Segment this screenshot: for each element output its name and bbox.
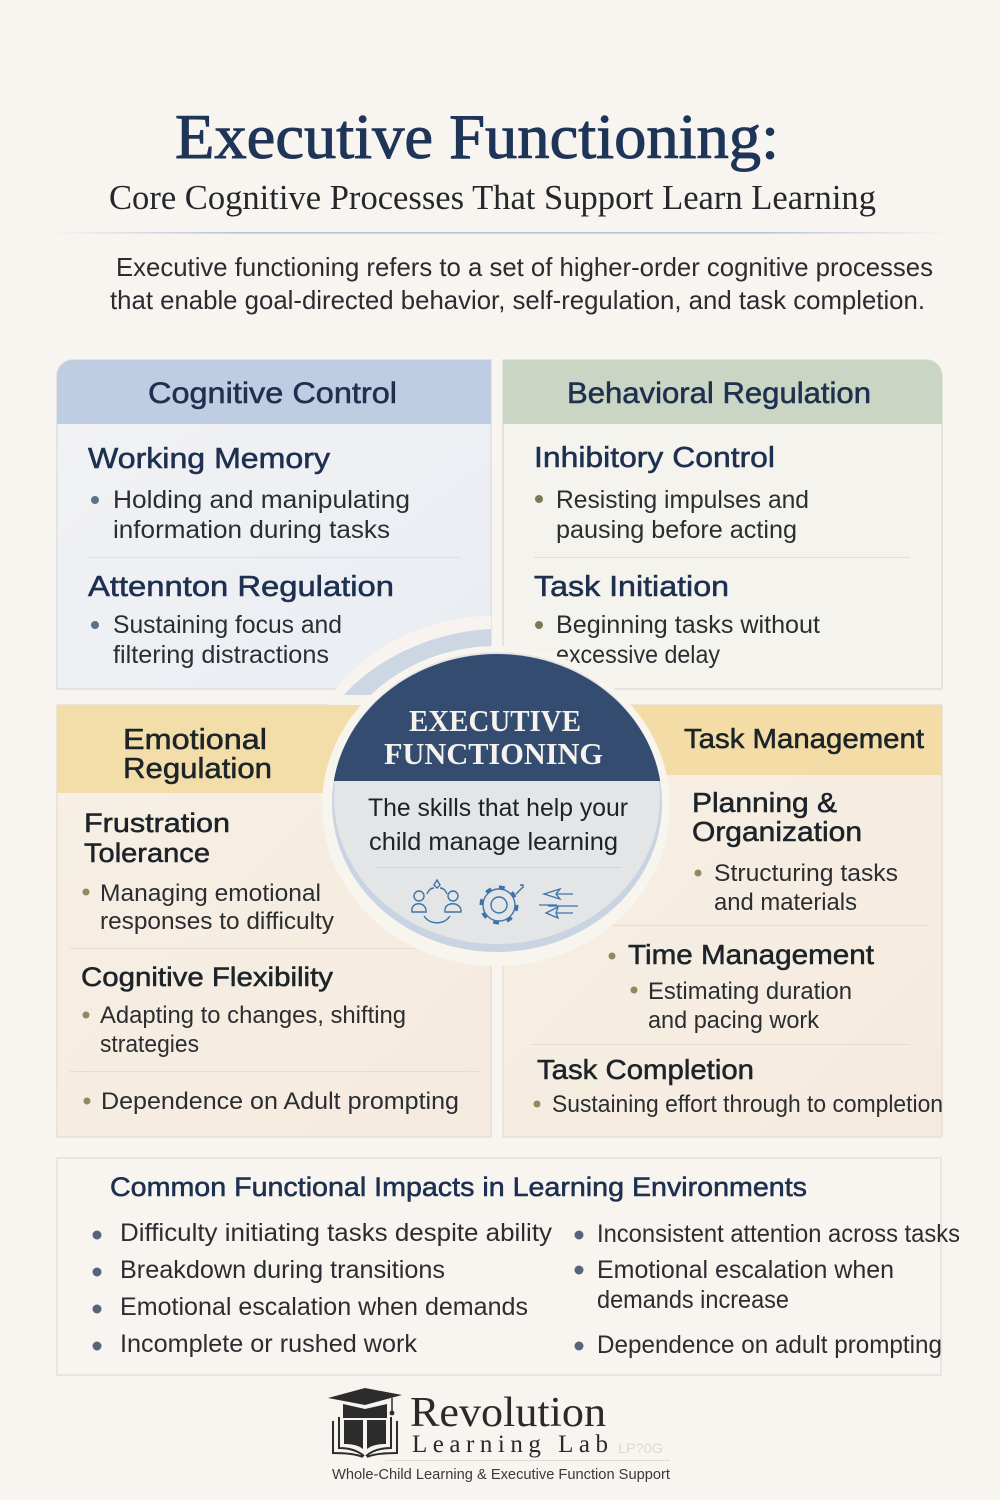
inhibitory control [534, 442, 809, 544]
dependence on adult prompting: Dependence on Adult prompting [101, 1088, 459, 1115]
frustration tolerance: Frustration [84, 808, 230, 838]
frustration tolerance: Managing emotional [100, 880, 321, 907]
working memory [88, 443, 410, 544]
planning and organization: Organization [692, 816, 862, 847]
task management header [503, 705, 942, 775]
emotional regulation header [57, 705, 491, 793]
badge text: child manage learning [369, 828, 618, 856]
attention regulation: Sustaining focus and [113, 611, 342, 639]
decorative ring behind badge [328, 616, 491, 705]
inhibitory control: pausing before acting [556, 516, 797, 544]
centre badge [322, 646, 670, 966]
tagline: Whole-Child Learning & Executive Function Support [332, 1467, 670, 1483]
left impact list: Difficulty initiating tasks despite ability [120, 1219, 553, 1247]
left impact list: Emotional escalation when demands [120, 1293, 528, 1321]
icon: graduation cap and book [328, 1388, 402, 1457]
cognitive flexibility: strategies [100, 1031, 199, 1058]
frustration tolerance: Tolerance [84, 838, 210, 868]
attention regulation [88, 571, 394, 669]
impacts heading: Common Functional Impacts in Learning Environments [110, 1172, 807, 1202]
task completion: Task Completion [537, 1054, 754, 1085]
badge title: FUNCTIONING [384, 736, 603, 771]
badge text [368, 794, 628, 856]
frustration tolerance [82, 808, 334, 935]
left impact list [92, 1219, 553, 1358]
frustration tolerance: responses to difficulty [100, 908, 334, 935]
logo: LP?0G [618, 1440, 663, 1456]
attention regulation: Attennton Regulation [88, 571, 394, 603]
time management: Estimating duration [648, 978, 852, 1005]
working memory: information during tasks [113, 516, 390, 544]
right impact list: Emotional escalation when [597, 1256, 894, 1284]
cognitive flexibility: Adapting to changes, shifting [100, 1002, 406, 1029]
logo: Learning Lab [412, 1431, 608, 1458]
task initiation: Beginning tasks without [556, 611, 820, 639]
task initiation: Task Initiation [534, 571, 729, 603]
intro text: Executive functioning refers to a set of higher-order cognitive processes [116, 252, 933, 282]
cognitive control header: Cognitive Control [148, 377, 397, 410]
task initiation [534, 571, 820, 669]
working memory: Holding and manipulating [113, 486, 410, 514]
planning and organization: Structuring tasks [714, 860, 898, 887]
panel: cognitive control [57, 360, 491, 689]
title: Executive Functioning: [175, 102, 779, 172]
time management: and pacing work [648, 1007, 820, 1034]
cognitive control header [57, 360, 491, 424]
inhibitory control: Resisting impulses and [556, 486, 809, 514]
planning and organization: and materials [714, 889, 857, 916]
intro text: that enable goal-directed behavior, self-regulation, and task completion. [110, 285, 925, 315]
time management [608, 939, 874, 1034]
icon: gear [481, 885, 523, 923]
attention regulation: filtering distractions [113, 641, 329, 669]
panel: common functional impacts [57, 1158, 960, 1375]
planning and organization [692, 787, 898, 916]
planning and organization: Planning & [692, 787, 837, 818]
icon: arrows [539, 889, 578, 918]
right impact list: demands increase [597, 1286, 789, 1314]
panel: behavioral regulation [503, 360, 942, 689]
task initiation: excessive delay [556, 641, 720, 669]
left impact list: Breakdown during transitions [120, 1256, 445, 1284]
badge title [384, 703, 603, 771]
intro text [110, 252, 933, 315]
time management: Time Management [628, 939, 874, 970]
task management header: Task Management [684, 723, 924, 754]
logo [328, 1388, 670, 1483]
subtitle: Core Cognitive Processes That Support Learn Learning [109, 178, 876, 217]
task completion: Sustaining effort through to completion [552, 1091, 943, 1118]
logo wordmark: Revolution [410, 1390, 606, 1436]
emotional regulation header: Emotional [123, 724, 267, 756]
left impact list: Incomplete or rushed work [120, 1330, 417, 1358]
right impact list [574, 1220, 960, 1359]
cognitive flexibility: Cognitive Flexibility [81, 962, 334, 992]
cognitive flexibility [81, 962, 406, 1058]
task completion [534, 1054, 943, 1118]
behavioral regulation header: Behavioral Regulation [567, 377, 871, 410]
inhibitory control: Inhibitory Control [534, 442, 775, 474]
badge text: The skills that help your [368, 794, 628, 822]
right impact list: Inconsistent attention across tasks [597, 1220, 960, 1248]
icon: people cycle [412, 880, 461, 923]
badge title: EXECUTIVE [409, 703, 581, 738]
panel: task management [503, 705, 943, 1137]
behavioral regulation header [503, 360, 942, 424]
emotional regulation header: Regulation [123, 753, 272, 785]
panel: emotional regulation [57, 705, 491, 1137]
right impact list: Dependence on adult prompting [597, 1331, 942, 1359]
working memory: Working Memory [88, 443, 331, 475]
